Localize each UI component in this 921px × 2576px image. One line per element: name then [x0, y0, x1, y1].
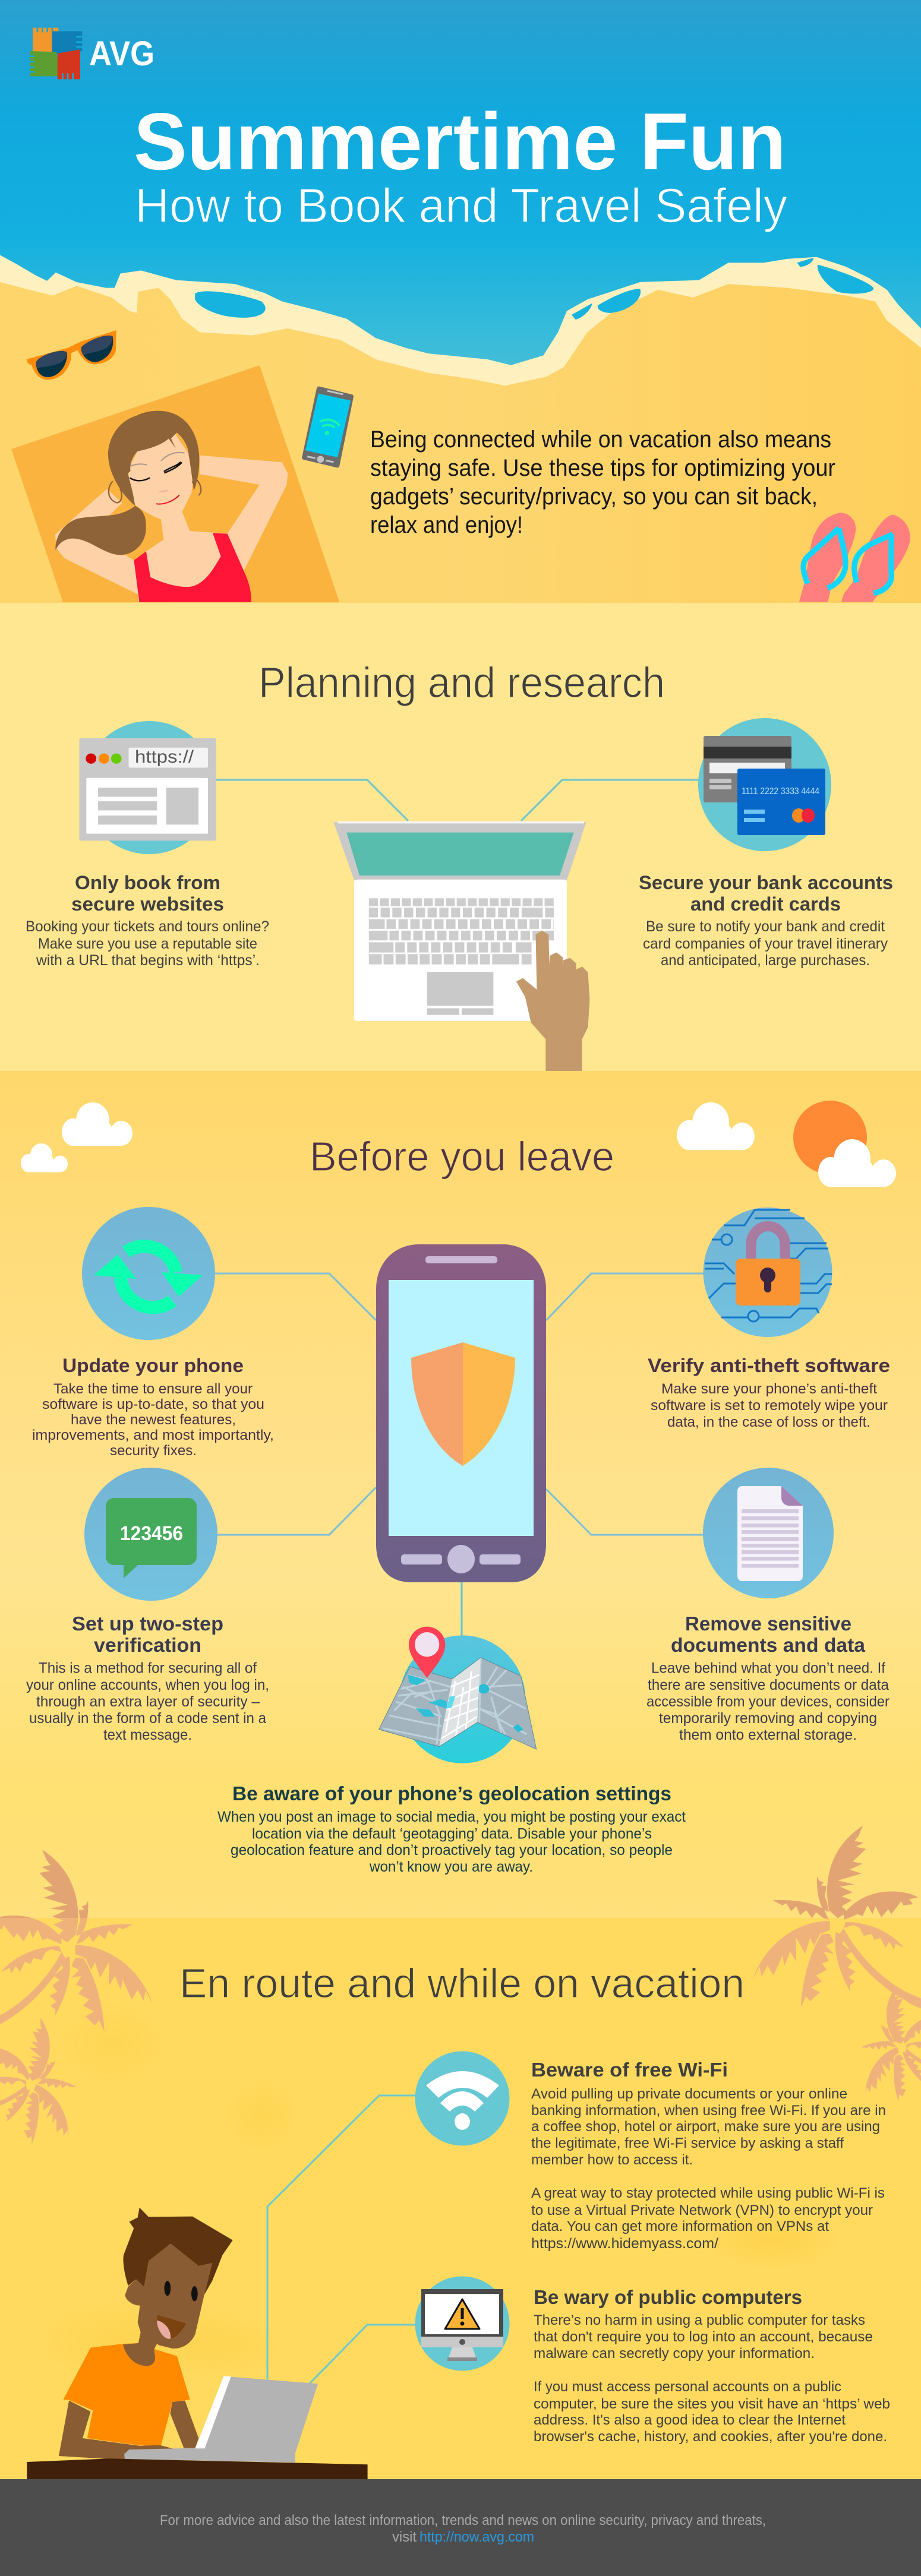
icon: phone with shield — [376, 1244, 546, 1582]
text: be wary of public computers: malware can secretly copy your information. — [534, 2346, 815, 2362]
text: secure your bank accounts: Be sure to notify your bank and credit — [646, 918, 885, 935]
paint texture patches — [36, 2002, 838, 2382]
text: remove sensitive documents — [646, 1613, 890, 1743]
connector lines to phone — [215, 1273, 704, 1636]
intro text: staying safe. Use these tips for optimizing your — [370, 455, 835, 481]
text: update your phone: Take the time to ensure all your — [53, 1381, 253, 1397]
icon: padlock circuit — [704, 1208, 832, 1337]
text: set up two-step verification: Set up two-step — [72, 1613, 223, 1635]
icon: folded map and pin — [379, 1627, 537, 1763]
text: remove sensitive documents: documents and data — [671, 1634, 866, 1656]
text: verify anti-theft software: Make sure your phone’s anti-theft — [661, 1381, 877, 1397]
text: set up two-step verification — [26, 1613, 269, 1743]
text: beware of free wi-fi: data. You can get more information on VPNs at — [531, 2218, 829, 2234]
panel: en route and while on vacation — [0, 1825, 921, 2479]
illustration: man at laptop — [27, 2208, 368, 2479]
text: geolocation settings: Be aware of your phone’s geolocation settings — [232, 1782, 671, 1804]
connector lines from laptop — [267, 2095, 415, 2384]
text: update your phone: Update your phone — [62, 1355, 244, 1376]
text: set up two-step verification: usually in the form of a code sent in a — [29, 1710, 266, 1727]
text: only book from secure websites: Only book from — [75, 872, 220, 893]
connector lines to laptop — [216, 780, 699, 821]
text: geolocation settings: geolocation feature and don’t proactively tag your location, so people — [231, 1842, 673, 1858]
text: set up two-step verification: text message. — [103, 1727, 192, 1743]
footer text — [160, 2512, 766, 2545]
text: be wary of public computers: If you must access personal accounts on a public — [534, 2379, 841, 2395]
palm trees — [0, 1825, 921, 2165]
text: update your phone — [32, 1355, 274, 1459]
heading: planning and research: Planning and research — [258, 659, 665, 707]
text: only book from secure websites: Make sure you use a reputable site — [38, 935, 257, 952]
panel: beach hero — [0, 0, 921, 603]
text: beware of free wi-fi: Avoid pulling up private documents or your online — [531, 2086, 847, 2102]
text: remove sensitive documents: Leave behind what you don’t need. If — [651, 1660, 885, 1676]
intro text: relax and enjoy! — [370, 512, 523, 538]
text: only book from secure websites: secure websites — [71, 893, 224, 915]
text: beware of free wi-fi: the legitimate, free Wi-Fi service by asking a staff — [531, 2135, 844, 2151]
text: beware of free wi-fi: a coffee shop, hotel or airport, make sure you are using — [531, 2119, 880, 2135]
icon: sunglasses — [27, 330, 116, 380]
footer text: For more advice and also the latest information, trends and news on online security, privacy and threats, — [160, 2512, 766, 2528]
text: update your phone: software is up-to-date, so that you — [42, 1396, 264, 1412]
logo wordmark: AVG — [89, 34, 154, 73]
text: beware of free wi-fi: banking information, when using free Wi-Fi. If you are in — [531, 2103, 886, 2119]
icon: secure browser: https:// — [135, 747, 194, 767]
title: Summertime Fun — [134, 96, 786, 187]
icon: laptop — [333, 821, 586, 1021]
text: beware of free wi-fi — [531, 2059, 886, 2252]
text: be wary of public computers: address. It's also a good idea to clear the Internet — [534, 2412, 846, 2428]
text: set up two-step verification: This is a method for securing all of — [39, 1660, 257, 1676]
icon: wifi — [415, 2052, 510, 2145]
ocean water — [0, 0, 921, 392]
text: verify anti-theft software: data, in the case of loss or theft. — [667, 1414, 870, 1430]
heading: en route and while on vacation: En route and while on vacation — [179, 1960, 745, 2006]
text: be wary of public computers — [534, 2286, 890, 2445]
text: verify anti-theft software — [648, 1355, 890, 1430]
icon: two-step code message — [84, 1468, 217, 1601]
text: beware of free wi-fi: Beware of free Wi-Fi — [531, 2059, 728, 2081]
text: beware of free wi-fi: https://www.hidemyass.com/ — [531, 2236, 718, 2252]
text: set up two-step verification: through an extra layer of security – — [36, 1693, 260, 1710]
text: secure your bank accounts: and anticipated, large purchases. — [661, 952, 870, 969]
text: remove sensitive documents: Remove sensitive — [685, 1613, 851, 1635]
heading: before you leave: Before you leave — [310, 1133, 614, 1180]
icon: update circle — [82, 1207, 215, 1340]
foam shoreline — [0, 255, 921, 387]
text: be wary of public computers: that don't require you to log into an account, because — [534, 2329, 873, 2345]
text: geolocation settings: When you post an image to social media, you might be posting your exact — [217, 1809, 686, 1825]
text: beware of free wi-fi: A great way to stay protected while using public Wi-Fi is — [531, 2185, 885, 2201]
icon: woman sunbathing — [55, 411, 288, 602]
intro text — [370, 426, 835, 538]
icon: smartphone with wifi — [304, 388, 351, 466]
text: be wary of public computers: browser's cache, history, and cookies, after you're done. — [534, 2429, 887, 2445]
text: only book from secure websites — [26, 872, 269, 969]
icon: flip flops — [799, 513, 910, 602]
text: beware of free wi-fi: member how to access it. — [531, 2152, 693, 2168]
intro text: Being connected while on vacation also means — [370, 426, 831, 453]
sand — [0, 282, 921, 603]
AVG logo — [29, 27, 83, 80]
text: secure your bank accounts — [639, 872, 893, 969]
icon: public computer warning — [415, 2276, 510, 2371]
text: remove sensitive documents: accessible from your devices, consider — [646, 1693, 890, 1710]
text: only book from secure websites: with a URL that begins with ‘https’. — [36, 952, 260, 969]
text: be wary of public computers: There’s no harm in using a public computer for tasks — [534, 2312, 865, 2328]
text: remove sensitive documents: temporarily removing and copying — [659, 1710, 877, 1727]
text: set up two-step verification: verification — [94, 1634, 201, 1656]
text: geolocation settings: location via the default ‘geotagging’ data. Disable your phone’s — [252, 1826, 652, 1842]
text: be wary of public computers: Be wary of public computers — [534, 2286, 802, 2308]
text: be wary of public computers: computer, be sure the sites you visit have an ‘https’ web — [534, 2396, 890, 2412]
text: remove sensitive documents: there are sensitive documents or data — [648, 1677, 889, 1693]
text: only book from secure websites: Booking your tickets and tours online? — [26, 918, 269, 935]
icon: hand — [517, 931, 589, 1071]
text: secure your bank accounts: card companies of your travel itinerary — [643, 935, 888, 952]
text: verify anti-theft software: software is set to remotely wipe your — [651, 1398, 888, 1414]
text: update your phone: have the newest features, — [71, 1412, 236, 1428]
text: set up two-step verification: your online accounts, when you log in, — [26, 1677, 269, 1693]
footer — [0, 2479, 921, 2576]
intro text: gadgets’ security/privacy, so you can sit back, — [370, 483, 818, 510]
footer text: http://now.avg.com — [420, 2529, 534, 2545]
icon: document — [703, 1468, 834, 1598]
text: verify anti-theft software: Verify anti-theft software — [648, 1355, 890, 1376]
subtitle: How to Book and Travel Safely — [135, 179, 787, 233]
icon: credit cards — [698, 718, 831, 851]
clouds and sun — [21, 1101, 896, 1187]
icon: secure browser — [79, 721, 216, 854]
tide pools — [195, 258, 873, 320]
text: update your phone: improvements, and most importantly, — [32, 1427, 274, 1443]
panel: before you leave — [0, 1071, 921, 1918]
panel: planning and research — [0, 603, 921, 1071]
text: secure your bank accounts: Secure your bank accounts — [639, 872, 893, 893]
text: secure your bank accounts: and credit cards — [690, 893, 841, 915]
footer text: visit — [392, 2529, 417, 2545]
text: geolocation settings — [217, 1782, 686, 1875]
icon: credit cards: 1111 2222 3333 4444 — [742, 786, 819, 796]
beach towel — [11, 365, 339, 602]
text: update your phone: security fixes. — [110, 1443, 197, 1459]
text: geolocation settings: won’t know you are away. — [369, 1858, 533, 1875]
text: remove sensitive documents: them onto external storage. — [679, 1727, 857, 1743]
text: beware of free wi-fi: to use a Virtual Private Network (VPN) to encrypt your — [531, 2202, 873, 2218]
icon: two-step code message: 123456 — [120, 1522, 183, 1545]
